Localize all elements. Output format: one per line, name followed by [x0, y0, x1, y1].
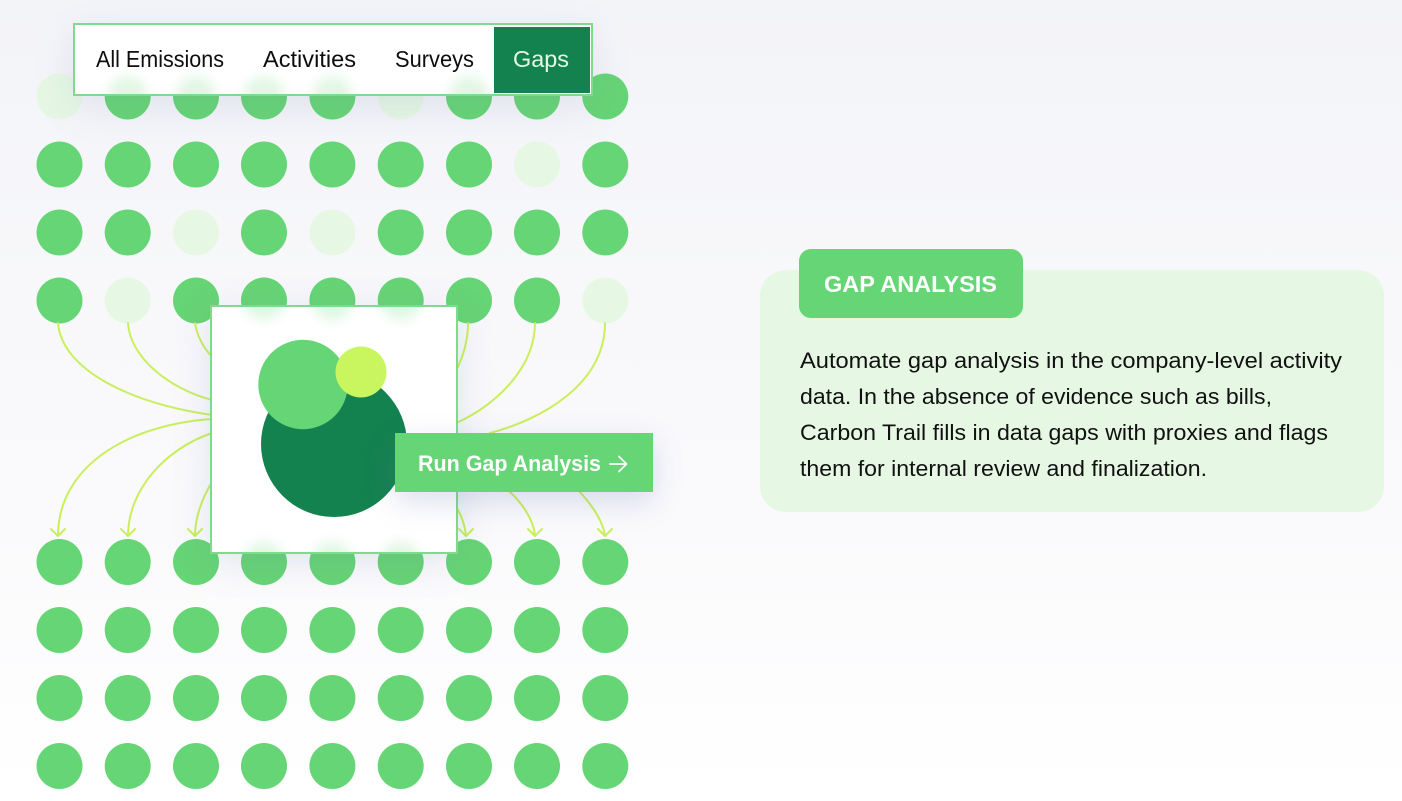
bottom dot grid	[36, 539, 628, 789]
tab labels	[96, 46, 569, 72]
tab labels: All Emissions	[96, 46, 224, 72]
tab labels: Activities	[263, 46, 356, 72]
button: Run Gap Analysis	[395, 433, 653, 492]
icon: arrow	[610, 456, 626, 472]
connector curves converging on the card	[58, 323, 605, 433]
body text: Automate gap analysis in the company-level activity	[800, 348, 1342, 373]
top dot grid	[36, 74, 628, 324]
active tab: Gaps	[494, 27, 590, 93]
heading tab: GAP ANALYSIS	[799, 249, 1023, 318]
button label: Run Gap Analysis	[418, 451, 601, 476]
tab bar	[73, 23, 593, 96]
heading tab: GAP ANALYSIS: GAP ANALYSIS	[824, 271, 997, 297]
panel: gap analysis description	[760, 270, 1384, 512]
icon: overlapping circles	[258, 340, 406, 517]
body text: them for internal review and finalization.	[800, 456, 1207, 481]
blurred dots showing through the card	[242, 307, 422, 552]
blurred dots showing through the tab bar	[105, 74, 492, 94]
body text: Carbon Trail fills in data gaps with proxies and flags	[800, 420, 1328, 445]
body text: data. In the absence of evidence such as bills,	[800, 384, 1272, 409]
body text	[800, 348, 1342, 481]
arrows flowing down to the bottom dots	[51, 419, 612, 536]
tab labels: Surveys	[395, 46, 474, 72]
center card	[210, 305, 458, 554]
tab labels: Gaps	[513, 46, 569, 72]
